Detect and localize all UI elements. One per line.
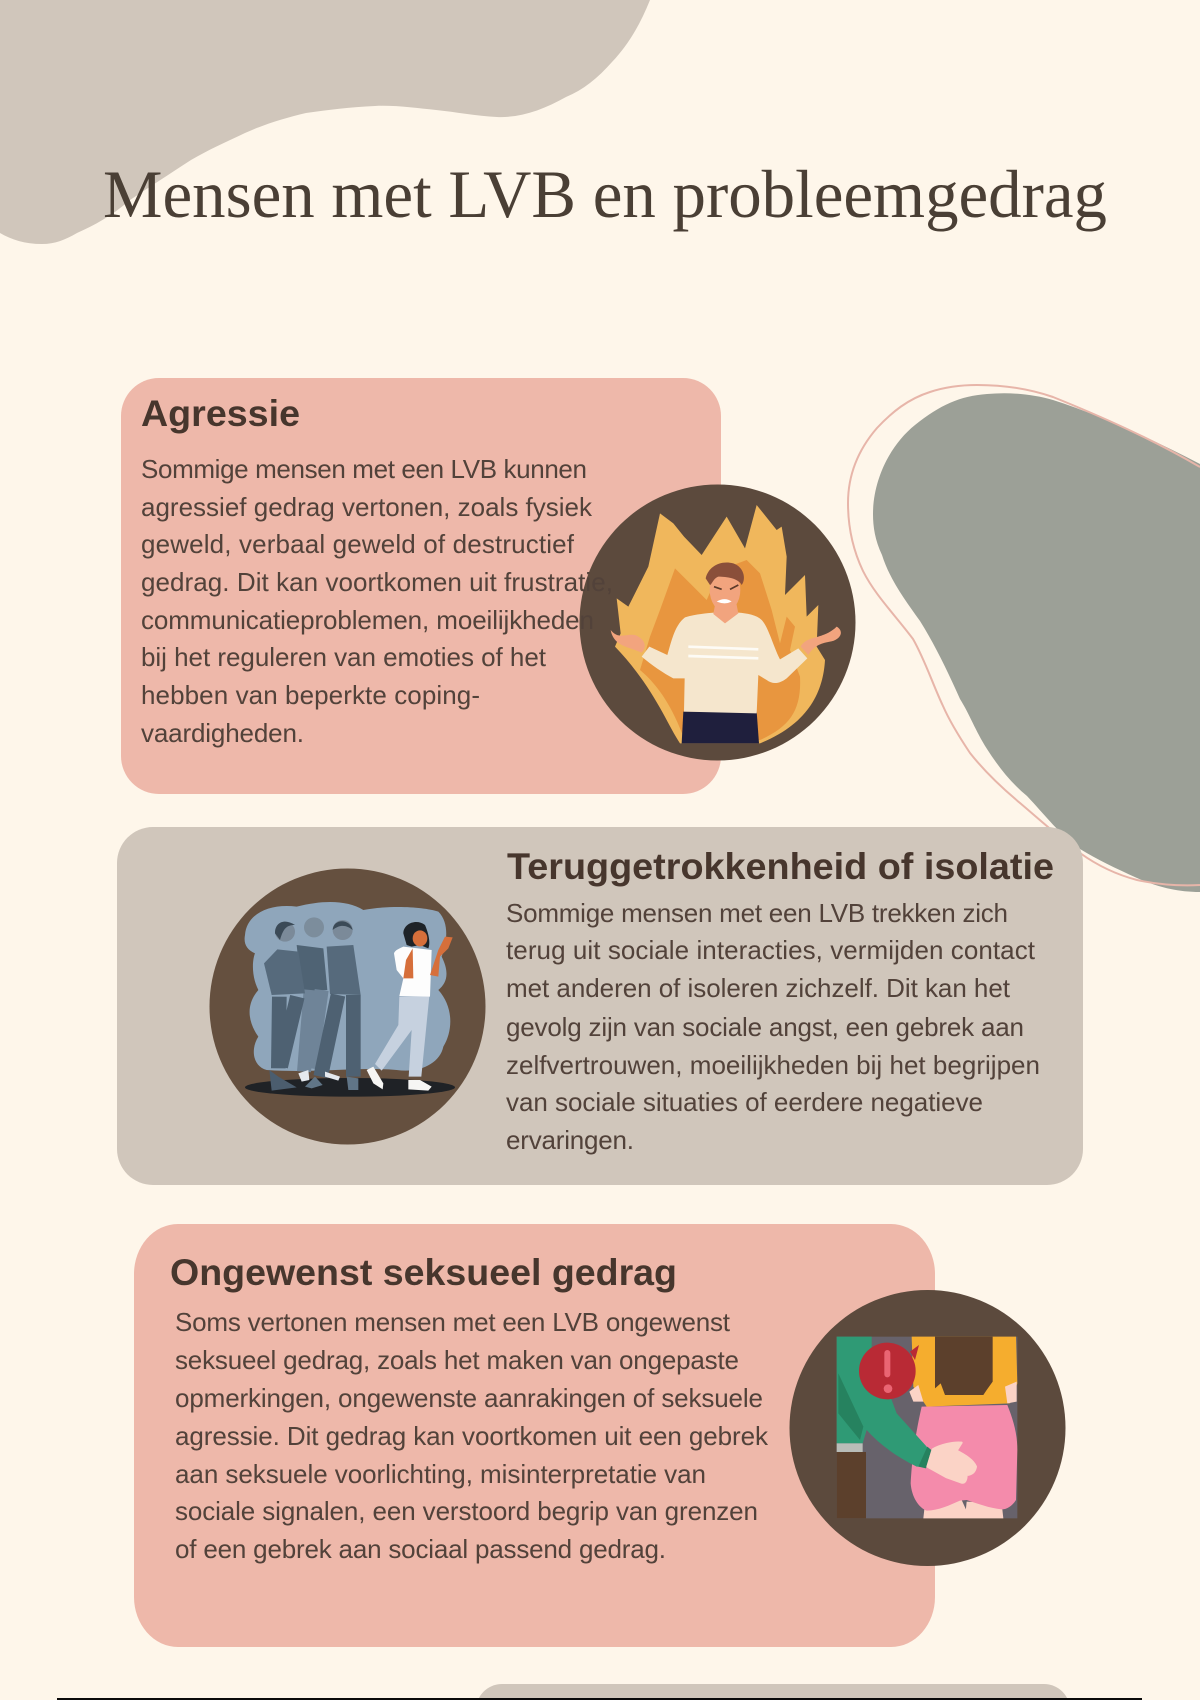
text block: Agressie: agressief gedrag vertonen, zoals fysiek (141, 492, 593, 522)
text block: Ongewenst seksueel gedrag: aan seksuele voorlichting, misinterpretatie van (175, 1459, 706, 1489)
text block: Agressie: communicatieproblemen, moeilijkheden (141, 605, 594, 635)
text block: Teruggetrokkenheid of isolatie: terug uit sociale interacties, vermijden contact (506, 935, 1036, 965)
title: Mensen met LVB en probleemgedrag (103, 156, 1107, 232)
background blob: top left (0, 0, 650, 244)
panel: Teruggetrokkenheid of isolatie (117, 827, 1083, 1185)
text block: Ongewenst seksueel gedrag: of een gebrek aan sociaal passend gedrag. (175, 1534, 666, 1564)
text block: Agressie: hebben van beperkte coping- (141, 680, 480, 710)
text block: Agressie: bij het reguleren van emoties of het (141, 642, 547, 672)
text block: Ongewenst seksueel gedrag: agressie. Dit gedrag kan voortkomen uit een gebrek (175, 1421, 769, 1451)
heading: Agressie: Agressie (141, 393, 300, 434)
text block: Teruggetrokkenheid of isolatie: Sommige mensen met een LVB trekken zich (506, 898, 1008, 928)
text block: Agressie: geweld, verbaal geweld of destructief (141, 529, 575, 559)
icon: man surrounded by flames (580, 484, 856, 760)
icon: unwanted touch with warning sign (790, 1290, 1066, 1566)
background blob: right with outline (848, 385, 1200, 892)
panel: Agressie (121, 378, 856, 794)
text block: Agressie (141, 454, 613, 748)
panel: next card cut off at page edge (476, 1684, 1070, 1700)
text block: Ongewenst seksueel gedrag (175, 1307, 769, 1564)
text block: Teruggetrokkenheid of isolatie: gevolg zijn van sociale angst, een gebrek aan (506, 1012, 1024, 1042)
text block: Agressie: Sommige mensen met een LVB kunnen (141, 454, 587, 484)
icon: woman walking away from three people (210, 868, 486, 1144)
text block: Ongewenst seksueel gedrag: sociale signalen, een verstoord begrip van grenzen (175, 1496, 758, 1526)
text block: Agressie: gedrag. Dit kan voortkomen uit frustratie, (141, 567, 613, 597)
text block: Ongewenst seksueel gedrag: opmerkingen, ongewenste aanrakingen of seksuele (175, 1383, 763, 1413)
text block: Teruggetrokkenheid of isolatie: ervaringen. (506, 1125, 634, 1155)
panel: Ongewenst seksueel gedrag (134, 1224, 1066, 1647)
text block: Ongewenst seksueel gedrag: Soms vertonen mensen met een LVB ongewenst (175, 1307, 731, 1337)
heading: Teruggetrokkenheid of isolatie: Teruggetrokkenheid of isolatie (507, 846, 1054, 887)
heading: Ongewenst seksueel gedrag: Ongewenst seksueel gedrag (170, 1252, 677, 1293)
text block: Teruggetrokkenheid of isolatie: met anderen of isoleren zichzelf. Dit kan het (506, 973, 1011, 1003)
text block: Teruggetrokkenheid of isolatie: zelfvertrouwen, moeilijkheden bij het begrijpen (506, 1050, 1040, 1080)
text block: Ongewenst seksueel gedrag: seksueel gedrag, zoals het maken van ongepaste (175, 1345, 739, 1375)
text block: Teruggetrokkenheid of isolatie (506, 898, 1040, 1155)
text block: Teruggetrokkenheid of isolatie: van sociale situaties of eerdere negatieve (506, 1087, 983, 1117)
text block: Agressie: vaardigheden. (141, 718, 304, 748)
